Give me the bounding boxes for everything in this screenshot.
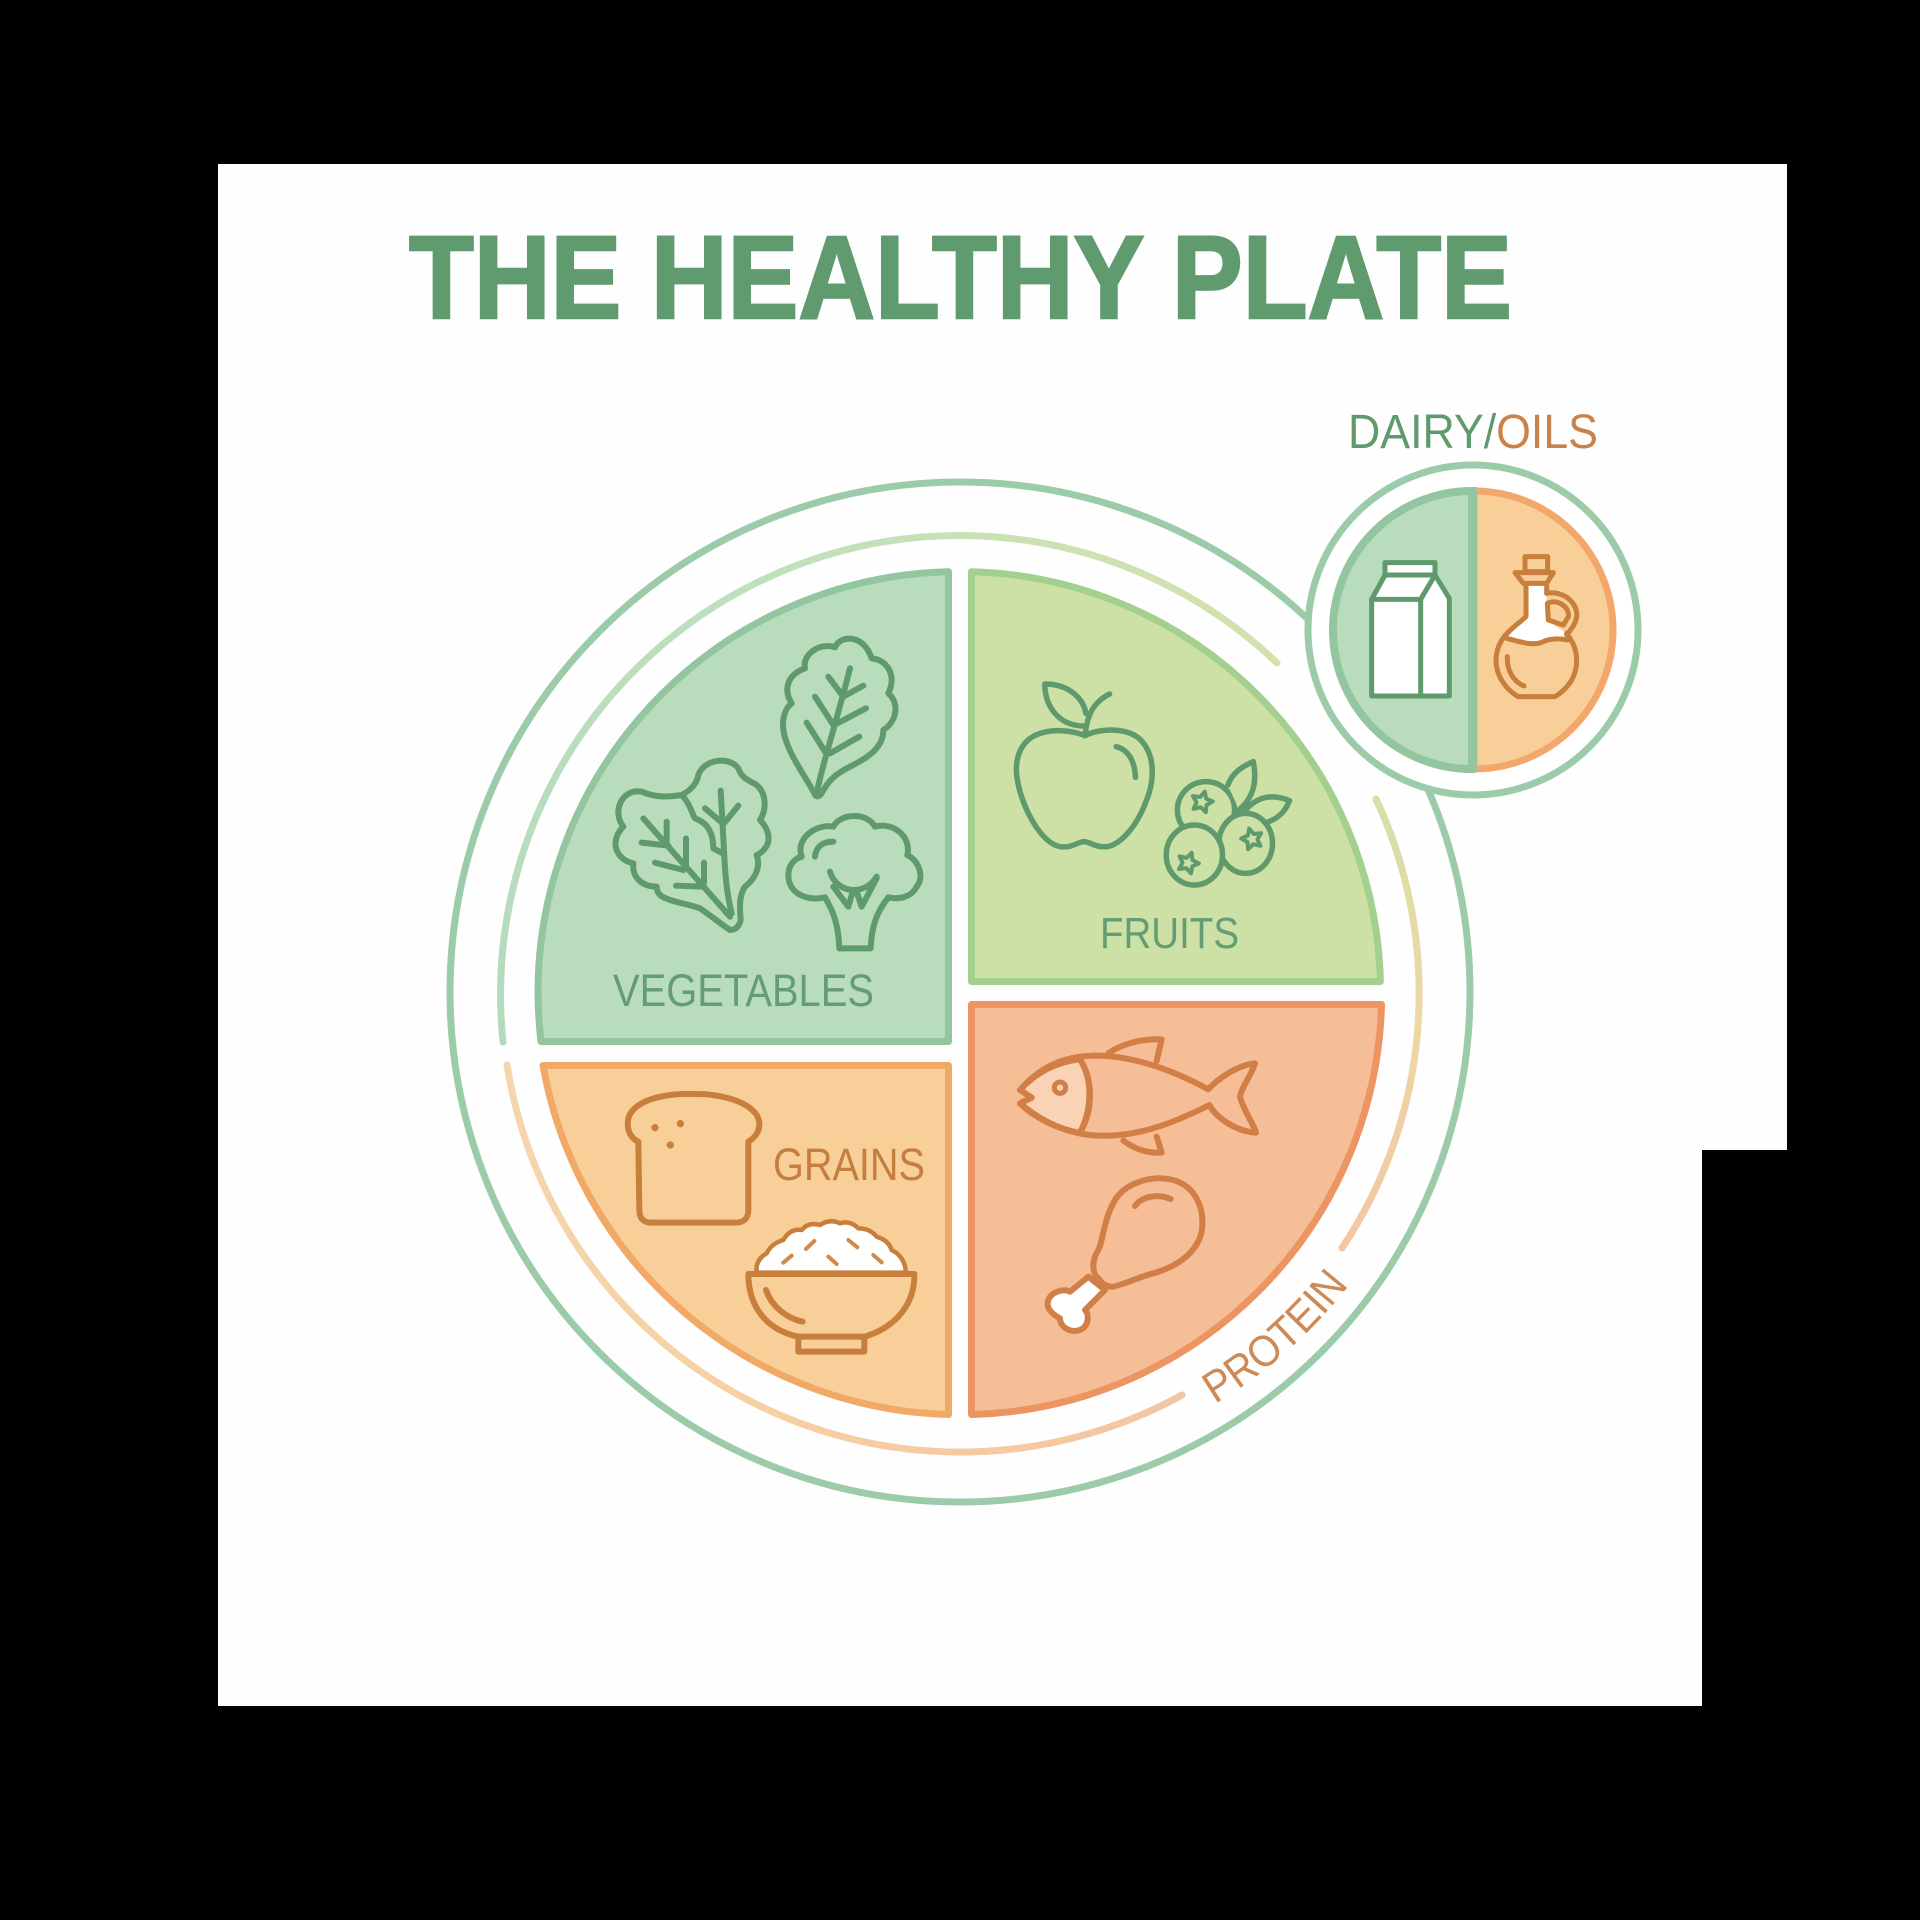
fruits sector <box>972 572 1380 982</box>
icon: drumstick <box>1048 1178 1202 1331</box>
inner ring segment: top <box>501 536 1277 1042</box>
icon: protein <box>1020 1039 1256 1331</box>
side plate rim <box>1308 465 1638 795</box>
panel: protein <box>968 1001 1385 1418</box>
label: grains: GRAINS <box>773 1139 925 1190</box>
panel: grains <box>543 1066 948 1414</box>
icon: bread <box>628 1094 759 1223</box>
icon: double leaf <box>616 761 769 930</box>
label: dairy / oils: DAIRY/OILS <box>1348 406 1598 459</box>
divider <box>1468 487 1477 772</box>
panel: fruits <box>972 572 1380 982</box>
oils half <box>1474 491 1613 769</box>
icon: broccoli <box>788 816 920 948</box>
icon: vegetables <box>616 639 920 948</box>
icon: oil jar <box>1496 557 1577 697</box>
icon: fish <box>1020 1039 1256 1153</box>
icon: berry stars <box>1175 789 1264 875</box>
label: protein (curved): PROTEIN <box>1202 1268 1347 1402</box>
plate <box>446 478 1474 1506</box>
label: fruits: FRUITS <box>1100 909 1239 958</box>
grains sector <box>543 1066 948 1414</box>
inner ring segment: right <box>1342 799 1419 1248</box>
inner ring segment: bottom <box>507 1065 1182 1452</box>
panel: vegetables <box>538 572 948 1042</box>
protein sector <box>972 1004 1382 1414</box>
panel: white background <box>218 164 1787 1706</box>
icon: apple <box>1016 684 1152 847</box>
icon: blueberries <box>1166 762 1289 885</box>
icon: grains <box>628 1094 914 1352</box>
label: vegetables: VEGETABLES <box>613 965 874 1016</box>
panel: dairy and oils side plate <box>1308 406 1638 795</box>
dairy half <box>1333 491 1472 769</box>
icon: milk carton <box>1372 563 1449 696</box>
title: THE HEALTHY PLATE <box>409 212 1512 344</box>
vegetables sector <box>538 572 948 1042</box>
outer plate rim <box>450 482 1470 1502</box>
icon: top leaf <box>783 639 895 796</box>
icon: rice bowl <box>748 1221 914 1352</box>
icon: fruits <box>1016 684 1289 885</box>
